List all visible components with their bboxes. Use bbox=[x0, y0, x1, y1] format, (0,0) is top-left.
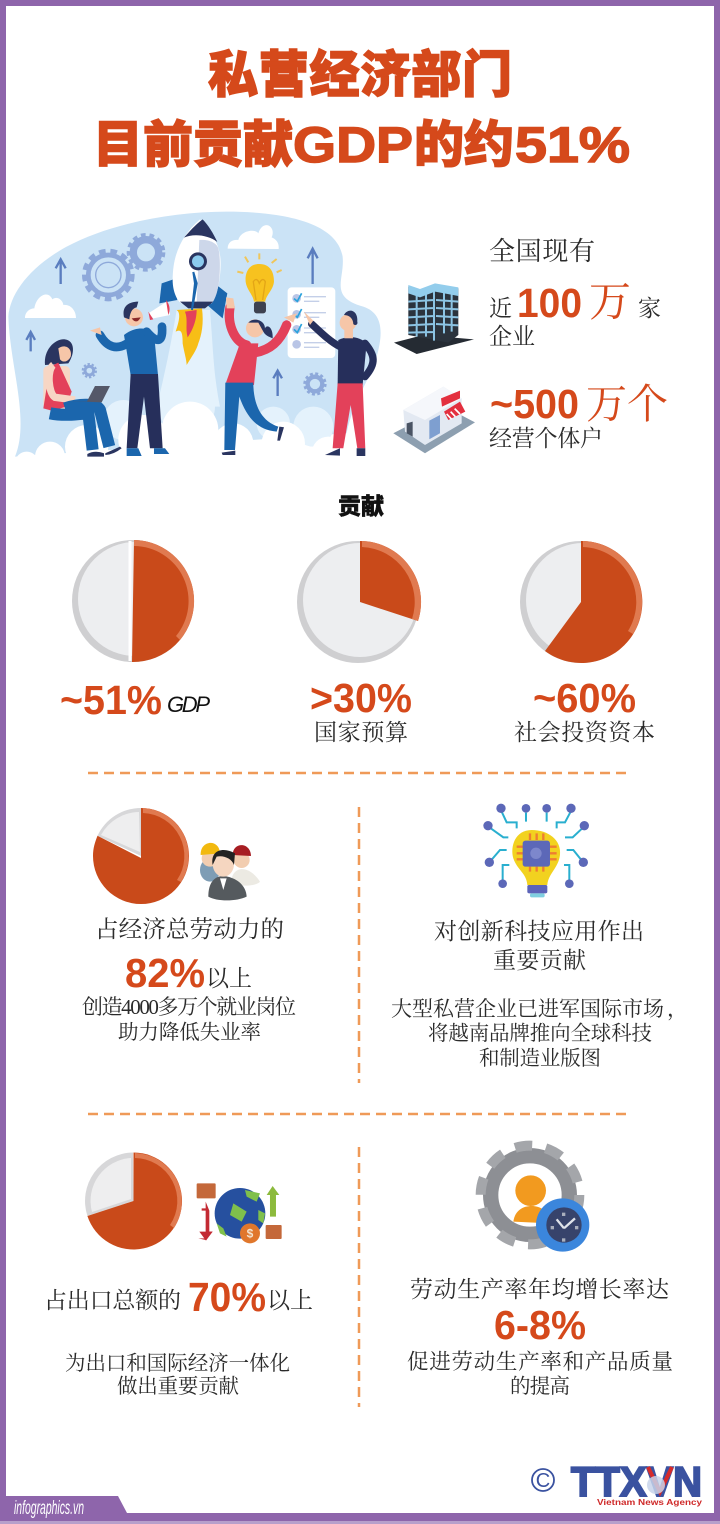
rocket bbox=[159, 219, 227, 365]
title: 目前贡献 bbox=[93, 117, 293, 173]
text: labour productivity: 6-8% bbox=[494, 1302, 586, 1348]
text: export share: 占出口总额的 bbox=[44, 1288, 181, 1313]
person: cheering woman bbox=[222, 297, 297, 455]
stat labels for contribution pies: ~51% bbox=[60, 677, 162, 723]
text: labour productivity: 的提高 bbox=[510, 1375, 570, 1398]
text: export share: 为出口和国际经济一体化 bbox=[65, 1352, 290, 1375]
icon: export globe: $ bbox=[247, 1227, 254, 1241]
pie chart: 30% state budget bbox=[297, 541, 421, 663]
text: labour productivity: 促进劳动生产率和产品质量 bbox=[407, 1350, 673, 1374]
title: 51% bbox=[515, 117, 630, 173]
text: export share: 做出重要贡献 bbox=[117, 1375, 240, 1398]
footer: copyright and TTXVN logo: TTXVN bbox=[571, 1458, 702, 1505]
text: innovation contribution: 和制造业版图 bbox=[479, 1047, 601, 1070]
gears bbox=[83, 235, 325, 394]
text: workforce share bbox=[82, 916, 296, 1044]
person: man pointing at checklist bbox=[304, 311, 373, 456]
text: export share: 70% bbox=[188, 1274, 266, 1320]
text: labour productivity: 劳动生产率年均增长率达 bbox=[410, 1277, 669, 1302]
light bulb bbox=[237, 253, 282, 313]
illustration: startup team and rocket bbox=[8, 212, 381, 475]
text: national enterprise counts: 企业 bbox=[489, 324, 535, 349]
icon: chip light bulb bbox=[483, 804, 589, 897]
text: innovation contribution bbox=[391, 919, 688, 1070]
section dividers bbox=[88, 773, 632, 1407]
text: workforce share: 助力降低失业率 bbox=[118, 1021, 261, 1044]
text: innovation contribution: 重要贡献 bbox=[493, 948, 586, 973]
stat labels for contribution pies: ~60% bbox=[533, 675, 636, 721]
text: national enterprise counts: 100 bbox=[517, 280, 582, 326]
text: national enterprise counts: 万个 bbox=[586, 381, 668, 427]
pie chart: 82% workforce bbox=[93, 808, 189, 904]
icon: workers group bbox=[200, 843, 260, 900]
text: innovation contribution: ， bbox=[667, 997, 688, 1022]
text: workforce share: 82% bbox=[125, 950, 205, 996]
text: national enterprise counts: ~500 bbox=[490, 381, 579, 427]
icon: gear with person and clock bbox=[481, 1146, 589, 1252]
stat labels for contribution pies: >30% bbox=[310, 675, 412, 721]
title: GDP bbox=[293, 117, 413, 173]
pie chart: 70% exports bbox=[85, 1152, 182, 1249]
text: national enterprise counts bbox=[489, 237, 668, 451]
up arrows bbox=[26, 249, 318, 396]
stat labels for contribution pies bbox=[60, 675, 655, 745]
person: man with megaphone bbox=[90, 300, 170, 456]
person: seated woman with laptop bbox=[43, 339, 122, 457]
text: national enterprise counts: 全国现有 bbox=[489, 237, 595, 266]
text: innovation contribution: 将越南品牌推向全球科技 bbox=[428, 1022, 652, 1045]
text: labour productivity bbox=[407, 1277, 673, 1398]
checklist sheet bbox=[288, 287, 335, 358]
title bbox=[93, 47, 630, 173]
text: national enterprise counts: 经营个体户 bbox=[489, 426, 603, 451]
text: innovation contribution: 大型私营企业已进军国际市场 bbox=[391, 997, 664, 1021]
footer: copyright and TTXVN logo: Vietnam News Agency bbox=[597, 1497, 702, 1507]
text: workforce share: 以上 bbox=[206, 966, 252, 991]
footer: site name: infographics.vn bbox=[14, 1498, 84, 1519]
text: export share: 以上 bbox=[267, 1288, 313, 1313]
stat labels for contribution pies: 国家预算 bbox=[314, 720, 408, 745]
stat labels for contribution pies: 社会投资资本 bbox=[514, 720, 655, 745]
icon: shop bbox=[393, 387, 475, 453]
text: export share bbox=[44, 1274, 313, 1398]
footer: copyright and TTXVN logo: C bbox=[536, 1470, 550, 1492]
text: national enterprise counts: 万 bbox=[589, 280, 631, 326]
title: 的约 bbox=[414, 117, 514, 173]
text: national enterprise counts: 家 bbox=[638, 296, 661, 321]
title: 私营经济部门 bbox=[208, 47, 512, 103]
text: workforce share: 创造4000多万个就业岗位 bbox=[82, 995, 296, 1019]
heading: contribution: 贡献 bbox=[338, 493, 384, 519]
text: workforce share: 占经济总劳动力的 bbox=[95, 916, 284, 943]
pie chart: 60% social investment bbox=[520, 541, 642, 663]
text: national enterprise counts: 近 bbox=[489, 296, 512, 321]
clouds bbox=[103, 378, 333, 447]
exhaust trail bbox=[157, 310, 220, 407]
text: innovation contribution: 对创新科技应用作出 bbox=[434, 919, 644, 944]
pie chart: 51% GDP bbox=[72, 540, 194, 662]
icon: office building bbox=[394, 283, 474, 354]
icon: export globe bbox=[197, 1183, 282, 1243]
stat labels for contribution pies: GDP bbox=[167, 692, 210, 717]
